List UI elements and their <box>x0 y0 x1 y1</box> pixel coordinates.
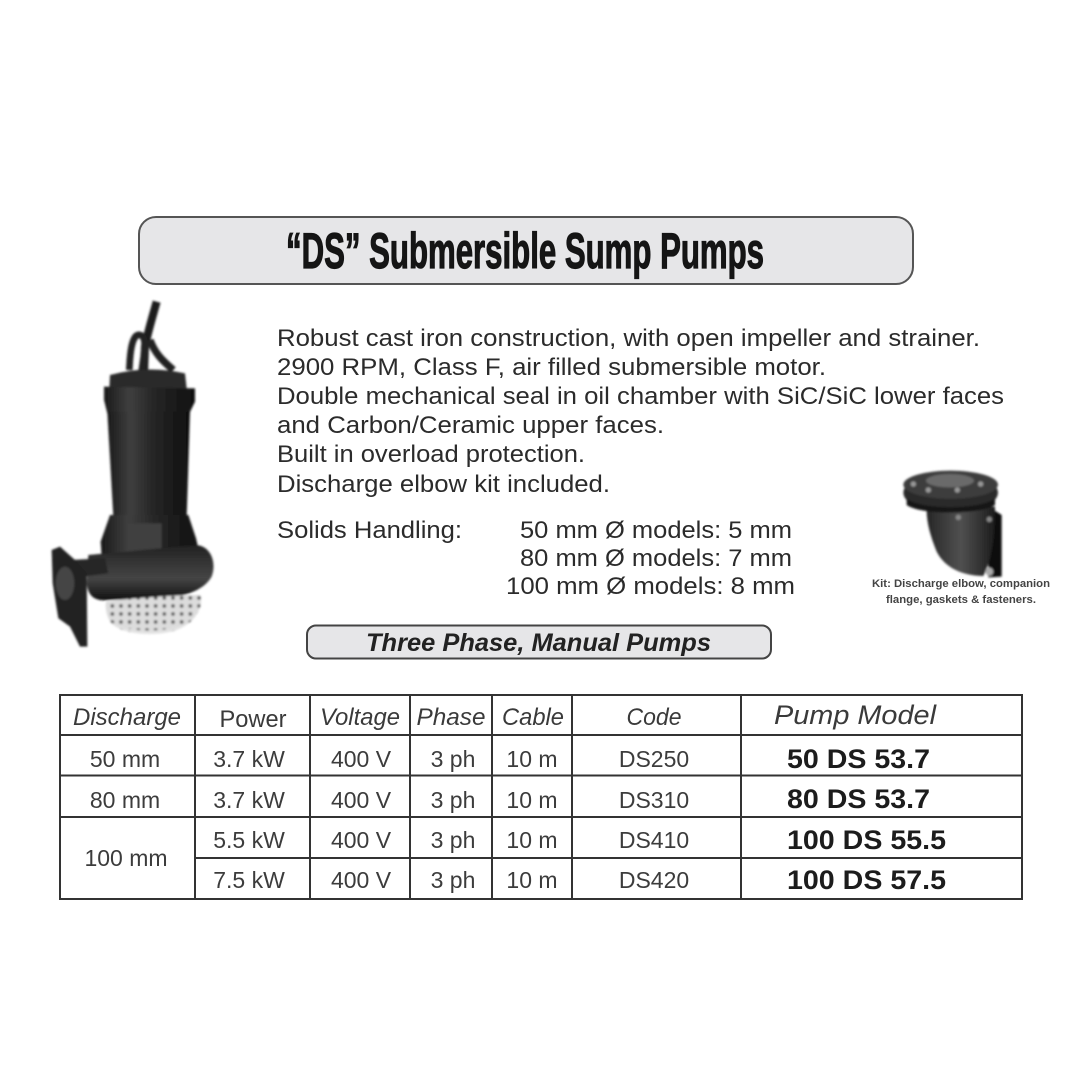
table row: 80 mm: 3 ph <box>431 787 475 813</box>
description text: 2900 RPM, Class F, air filled submersible motor. <box>277 354 826 381</box>
table row: 80 mm: 80 mm <box>90 787 160 813</box>
table row: 100 mm, 7.5 kW: 7.5 kW <box>213 867 285 893</box>
table row: 100 mm, 7.5 kW <box>213 865 946 895</box>
table header row: Discharge <box>73 704 181 731</box>
table row: 50 mm: DS250 <box>619 746 689 772</box>
title banner <box>139 217 913 284</box>
solids handling specs: 100 mm Ø models: 8 mm <box>506 573 795 600</box>
table row: 100 mm, 7.5 kW: DS420 <box>619 867 689 893</box>
table row: 50 mm: 10 m <box>506 746 558 772</box>
table row: 100 mm, 7.5 kW: 100 DS 57.5 <box>787 865 946 895</box>
caption: elbow kit <box>872 578 1050 606</box>
description text: Robust cast iron construction, with open impeller and strainer. <box>277 325 980 352</box>
caption: elbow kit: Kit: Discharge elbow, companion <box>872 578 1050 590</box>
description text: and Carbon/Ceramic upper faces. <box>277 412 664 439</box>
table row: 100 mm, 7.5 kW: 10 m <box>506 867 558 893</box>
table row: 100 mm, 5.5 kW: 100 mm <box>84 845 168 871</box>
icon: submersible pump photo <box>52 302 214 647</box>
table row: 50 mm: 400 V <box>331 746 392 772</box>
icon: discharge elbow kit photo <box>903 471 1002 577</box>
table header row: Pump Model <box>774 700 937 730</box>
table row: 100 mm, 5.5 kW: DS410 <box>619 827 689 853</box>
table row: 80 mm: DS310 <box>619 787 689 813</box>
solids handling specs <box>277 517 795 600</box>
description text: Double mechanical seal in oil chamber with SiC/SiC lower faces <box>277 383 1004 410</box>
table row: 100 mm, 7.5 kW: 3 ph <box>431 867 475 893</box>
title: “DS” Submersible Sump Pumps <box>286 223 764 279</box>
table row: 80 mm: 3.7 kW <box>213 787 285 813</box>
solids handling specs: 50 mm Ø models: 5 mm <box>520 517 792 544</box>
table header row: Power <box>220 706 287 733</box>
table row: 80 mm: 400 V <box>331 787 392 813</box>
table row: 50 mm: 3 ph <box>431 746 475 772</box>
table header row <box>73 700 937 733</box>
description text: Discharge elbow kit included. <box>277 471 610 498</box>
solids handling specs: 80 mm Ø models: 7 mm <box>520 545 792 572</box>
table row: 100 mm, 5.5 kW: 100 DS 55.5 <box>787 825 946 855</box>
subheading: three phase manual pumps: Three Phase, Manual Pumps <box>366 629 711 657</box>
description text: Built in overload protection. <box>277 441 585 468</box>
table row: 100 mm, 7.5 kW: 400 V <box>331 867 392 893</box>
solids handling specs: Solids Handling: <box>277 517 462 544</box>
table row: 80 mm: 80 DS 53.7 <box>787 784 930 814</box>
subheading: three phase manual pumps <box>307 626 771 658</box>
table row: 100 mm, 5.5 kW: 400 V <box>331 827 392 853</box>
table row: 50 mm: 3.7 kW <box>213 746 285 772</box>
table row: 50 mm: 50 mm <box>90 746 160 772</box>
table row: 50 mm <box>90 744 930 774</box>
table row: 100 mm, 5.5 kW: 5.5 kW <box>213 827 285 853</box>
table row: 80 mm <box>90 784 930 814</box>
table header row: Phase <box>416 704 486 731</box>
specification table <box>60 695 1022 899</box>
table row: 80 mm: 10 m <box>506 787 558 813</box>
table header row: Voltage <box>320 704 400 731</box>
table row: 100 mm, 5.5 kW: 3 ph <box>431 827 475 853</box>
table header row: Cable <box>502 704 564 731</box>
table header row: Code <box>626 704 682 731</box>
description text <box>277 325 1004 498</box>
table row: 100 mm, 5.5 kW <box>84 825 946 871</box>
caption: elbow kit: flange, gaskets & fasteners. <box>886 594 1036 606</box>
table row: 50 mm: 50 DS 53.7 <box>787 744 930 774</box>
table row: 100 mm, 5.5 kW: 10 m <box>506 827 558 853</box>
